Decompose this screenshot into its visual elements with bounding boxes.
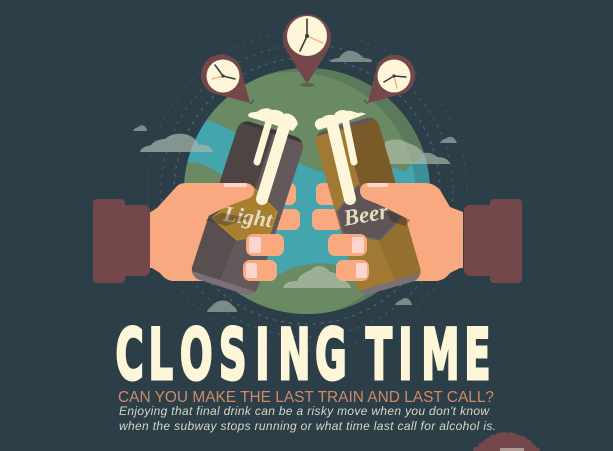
right can: Beer: [313, 110, 423, 297]
foam: left can: [248, 108, 298, 199]
badge: bottom right seal: [473, 432, 540, 451]
clock pin: left: [201, 54, 254, 104]
land: bottom continent: [237, 263, 378, 314]
intro text: when the subway stops running or what time last call for alcohol is.: [119, 419, 496, 433]
cloud: bottom left: [207, 300, 237, 312]
foam: right can: [315, 110, 366, 199]
subtitle: CAN YOU MAKE THE LAST TRAIN AND LAST CALL?: [118, 389, 494, 406]
left can: Light: [189, 108, 306, 298]
left hand fingers behind can: [270, 183, 300, 230]
intro text: [119, 404, 496, 433]
land: left continent: [184, 162, 222, 184]
right hand fingers behind can: [312, 183, 342, 230]
land: top continent: [206, 68, 424, 172]
right thumb: [360, 183, 425, 225]
globe shade crescent: [268, 68, 430, 310]
right sleeve and palm: [380, 183, 522, 283]
clock pin: right: [364, 55, 415, 104]
can label: Light: Light: [221, 201, 275, 232]
cloud: left small: [133, 125, 147, 131]
left sleeve and palm: [93, 183, 240, 283]
left hand front fingers: [243, 234, 284, 281]
can label: Beer: Beer: [341, 198, 391, 231]
cloud: top right: [330, 51, 372, 62]
cloud: bottom right: [395, 298, 412, 305]
globe: [184, 68, 430, 314]
cloud: right small: [440, 137, 457, 143]
dashed orbit rings: [147, 31, 467, 351]
infographic header illustration: [93, 14, 540, 451]
can label: Beer: [337, 185, 402, 240]
cloud on globe bottom: [283, 266, 351, 288]
title: CLOSING TIME: [116, 316, 491, 396]
clock pin: center: [283, 14, 331, 87]
left thumb: [190, 183, 254, 225]
right hand front fingers: [328, 234, 369, 281]
can label: Light: [212, 187, 277, 240]
cloud: right large: [385, 139, 450, 164]
cloud: left large: [140, 134, 213, 152]
intro text: Enjoying that final drink can be a risky move when you don't know: [119, 404, 490, 418]
